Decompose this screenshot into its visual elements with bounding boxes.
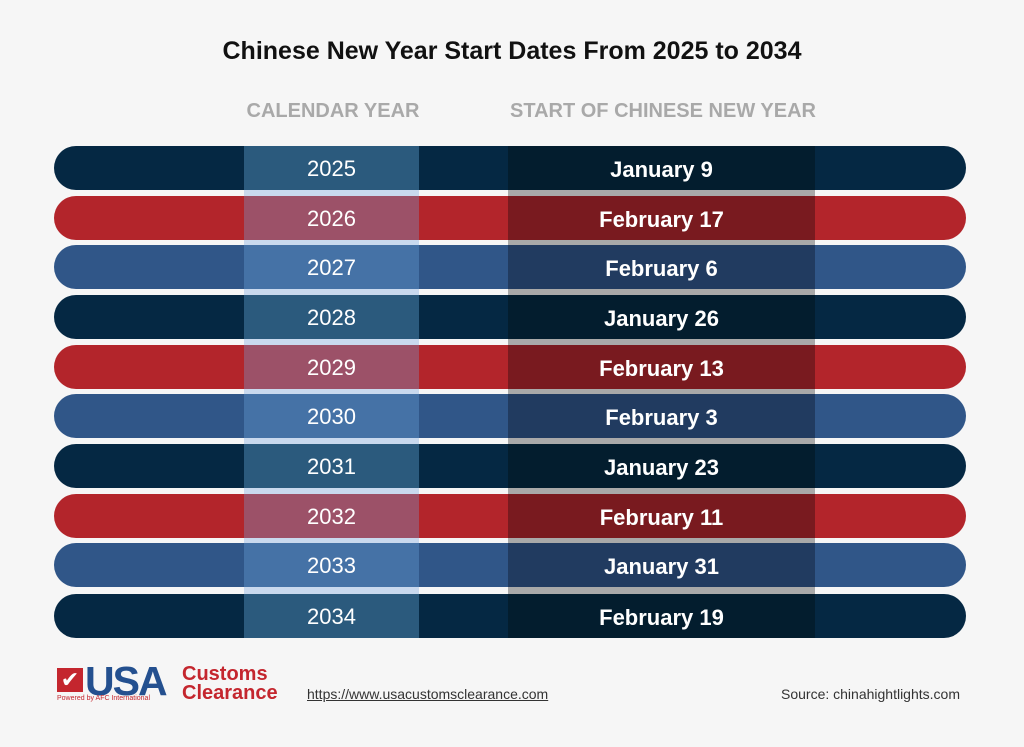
logo: Powered by AFC International bbox=[57, 695, 150, 702]
row 2026: 2026 bbox=[307, 206, 356, 231]
row 2030: February 3 bbox=[605, 405, 718, 430]
row 2033: January 31 bbox=[604, 554, 719, 579]
row 2030 bbox=[54, 394, 966, 438]
row 2034: 2034 bbox=[307, 604, 356, 629]
source: Source: chinahightlights.com bbox=[781, 686, 960, 702]
icon: checkbox: ✔ bbox=[61, 667, 79, 692]
row 2027: February 6 bbox=[605, 256, 718, 281]
row 2033: 2033 bbox=[307, 553, 356, 578]
row 2029 bbox=[54, 345, 966, 389]
row 2026: February 17 bbox=[599, 207, 724, 232]
row 2028: January 26 bbox=[604, 306, 719, 331]
row 2028 bbox=[54, 295, 966, 339]
header: start of chinese new year: START OF CHINESE NEW YEAR bbox=[510, 100, 816, 122]
row 2025 bbox=[54, 146, 966, 190]
icon: checkbox bbox=[57, 668, 83, 692]
row 2025: January 9 bbox=[610, 157, 713, 182]
row 2030: 2030 bbox=[307, 404, 356, 429]
logo: Clearance bbox=[182, 682, 278, 704]
row 2025: 2025 bbox=[307, 156, 356, 181]
row 2031: 2031 bbox=[307, 454, 356, 479]
row 2029: 2029 bbox=[307, 355, 356, 380]
row 2031: January 23 bbox=[604, 455, 719, 480]
logo bbox=[57, 658, 278, 704]
row 2032: 2032 bbox=[307, 504, 356, 529]
row 2029: February 13 bbox=[599, 356, 724, 381]
title: Chinese New Year Start Dates From 2025 to 2034 bbox=[222, 37, 801, 65]
row 2034 bbox=[54, 594, 966, 638]
row 2033 bbox=[54, 543, 966, 587]
row 2028: 2028 bbox=[307, 305, 356, 330]
website link: https://www.usacustomsclearance.com bbox=[307, 686, 548, 702]
logo: USA bbox=[85, 658, 166, 704]
row 2032 bbox=[54, 494, 966, 538]
table of dates bbox=[54, 146, 966, 638]
header: calendar year: CALENDAR YEAR bbox=[246, 100, 419, 122]
row 2026 bbox=[54, 196, 966, 240]
row 2034: February 19 bbox=[599, 605, 724, 630]
row 2031 bbox=[54, 444, 966, 488]
logo: Customs bbox=[182, 663, 268, 685]
row 2027: 2027 bbox=[307, 255, 356, 280]
row 2032: February 11 bbox=[600, 505, 723, 530]
row 2027 bbox=[54, 245, 966, 289]
